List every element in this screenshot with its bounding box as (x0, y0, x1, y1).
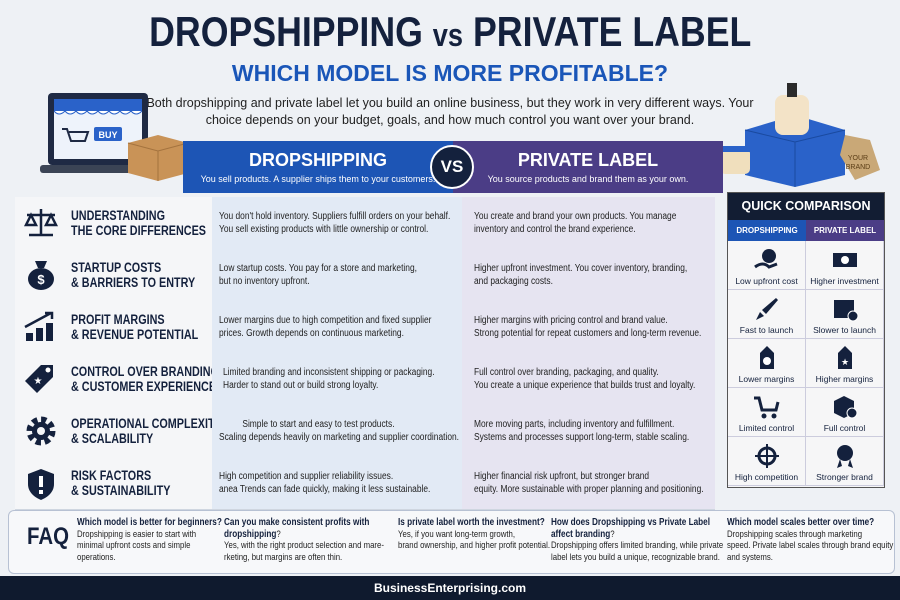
row: core differences: You don't hold inventory. Suppliers fulfill orders on your behalf. (219, 211, 450, 222)
row: profit margins: Higher margins with pricing control and brand value. (474, 315, 668, 326)
illustration: branded box (723, 83, 880, 187)
intro text: Both dropshipping and private label let you build an online business, but they work in very different ways. Your choice depends on your budget, goals, and how much control you want over your brand. (146, 96, 754, 127)
faq 5: speed. Private label scales through brand equity (727, 540, 893, 551)
title: DROPSHIPPING vs PRIVATE LABEL (149, 8, 751, 55)
row: risk: RISK FACTORS (71, 468, 151, 483)
panel: quick comparison: Stronger brand (816, 472, 873, 482)
faq 3: Is private label worth the investment? (398, 517, 545, 528)
faq 2: Can you make consistent profits with (224, 517, 369, 528)
row: branding (15, 353, 715, 405)
panel: quick comparison: Limited control (739, 423, 794, 433)
row: profit margins: Strong potential for repeat customers and long-term revenue. (474, 328, 701, 339)
row: operations (15, 405, 715, 457)
icon: scales (24, 209, 58, 236)
illustration: branded box: YOUR (848, 155, 868, 162)
row: profit margins: & REVENUE POTENTIAL (71, 327, 198, 342)
row: startup costs (15, 249, 715, 301)
faq 2: rketing, but margins are often thin. (224, 552, 342, 562)
row: risk: High competition and supplier reliability issues. (219, 471, 393, 482)
row: profit margins: PROFIT MARGINS (71, 312, 165, 327)
row: risk: & SUSTAINABILITY (71, 483, 170, 498)
row: startup costs: Low startup costs. You pay for a store and marketing, (219, 263, 417, 274)
row: operations: Simple to start and easy to test products. (242, 419, 395, 430)
FAQ label: FAQ (27, 523, 69, 550)
panel: quick comparison (727, 192, 885, 488)
icon: money bag (28, 261, 54, 290)
quick comparison heading (728, 193, 884, 220)
row: core differences: inventory and control the brand experience. (474, 224, 636, 235)
panel: quick comparison: Slower to launch (813, 325, 876, 335)
row: core differences: You sell existing products with little ownership or control. (219, 224, 428, 235)
panel: quick comparison: Fast to launch (740, 325, 793, 335)
row: profit margins: prices. Growth depends on continuous marketing. (219, 328, 404, 339)
faq 1: Which model is better for beginners? (77, 517, 222, 528)
icon: growth chart (24, 312, 54, 341)
faq 4 (551, 517, 723, 562)
icon: shield (28, 469, 54, 500)
faq 3 (398, 517, 550, 551)
panel: quick comparison: Higher margins (816, 374, 873, 384)
row: startup costs: STARTUP COSTS (71, 260, 161, 275)
faq 3: brand ownership, and higher profit potential. (398, 540, 550, 551)
panel: quick comparison: Full control (824, 423, 865, 433)
header: private label: You source products and brand them as your own. (488, 174, 688, 184)
faq 4: How does Dropshipping vs Private Label (551, 517, 710, 528)
icon: money bag: $ (37, 272, 45, 287)
vs badge: VS (441, 157, 463, 176)
row: profit margins: Lower margins due to high competition and fixed supplier (219, 315, 431, 326)
faq 5: Dropshipping scales through marketing (727, 528, 862, 540)
faq 4: Dropshipping offers limited branding, while private (551, 540, 723, 551)
footer (0, 576, 900, 600)
row: core differences (15, 197, 715, 249)
icon: tag (25, 365, 53, 393)
faq 5 (727, 517, 894, 562)
panel: quick comparison: DROPSHIPPING (736, 226, 798, 235)
icon: tag: ★ (34, 376, 43, 387)
row: operations: More moving parts, including inventory and fulfillment. (474, 419, 674, 430)
row: risk: anea Trends can fade quickly, making it less sustainable. (219, 484, 430, 495)
panel: FAQ (8, 510, 895, 574)
row: branding: You create a unique experience that builds trust and loyalty. (474, 380, 695, 391)
row: branding: Harder to stand out or build strong loyalty. (223, 380, 378, 391)
panel: quick comparison: PRIVATE LABEL (814, 226, 876, 235)
row: operations: OPERATIONAL COMPLEXITY (71, 416, 222, 431)
faq 2: dropshipping? (224, 528, 281, 540)
row: branding: CONTROL OVER BRANDING (71, 364, 219, 379)
faq 1: operations. (77, 552, 116, 562)
panel: quick comparison: High competition (735, 472, 798, 482)
vs badge (430, 145, 474, 189)
panel: quick comparison: Low upfront cost (735, 276, 798, 286)
row: startup costs: and packaging costs. (474, 276, 553, 287)
row: core differences: UNDERSTANDING (71, 208, 165, 223)
footer: BusinessEnterprising.com (374, 581, 526, 595)
illustration: laptop store (40, 93, 183, 181)
faq 2: Yes, with the right product selection and mare- (224, 540, 384, 551)
illustration: laptop store: BUY (98, 130, 118, 140)
row: startup costs: & BARRIERS TO ENTRY (71, 275, 195, 290)
faq 4: affect branding? (551, 528, 615, 540)
row: profit margins (15, 301, 715, 353)
faq 4: label lets you build a unique, recognizable brand. (551, 552, 720, 562)
faq 1: minimal upfront costs and simple (77, 540, 190, 551)
faq 5: and systems. (727, 552, 773, 562)
faq 1: Dropshipping is easier to start with (77, 528, 196, 540)
header: dropshipping: DROPSHIPPING (249, 150, 387, 170)
header: private label: PRIVATE LABEL (518, 150, 658, 170)
header: dropshipping: You sell products. A supplier ships them to your customers. (201, 174, 435, 184)
panel: quick comparison: Lower margins (739, 374, 794, 384)
row: risk: equity. More sustainable with proper planning and positioning. (474, 484, 704, 495)
panel: quick comparison: ★ (840, 357, 849, 367)
header: private label (453, 141, 723, 193)
header: dropshipping (183, 141, 453, 193)
row: risk: Higher financial risk upfront, but stronger brand (474, 471, 649, 482)
illustration: branded box: BRAND (846, 164, 870, 171)
faq 5: Which model scales better over time? (727, 517, 874, 528)
panel: quick comparison: Higher investment (810, 276, 879, 286)
faq 2 (224, 517, 384, 562)
row: operations: Scaling depends heavily on marketing and supplier coordination. (219, 432, 459, 443)
row: operations: & SCALABILITY (71, 431, 153, 446)
icon: gear (26, 416, 56, 446)
quick comparison heading: QUICK COMPARISON (742, 199, 870, 213)
row: operations: Systems and processes support long-term, stable scaling. (474, 432, 689, 443)
faq 1 (77, 517, 222, 562)
faq 3: Yes, if you want long-term growth, (398, 528, 515, 540)
row: branding: & CUSTOMER EXPERIENCE (71, 379, 216, 394)
row: startup costs: Higher upfront investment. You cover inventory, branding, (474, 263, 687, 274)
row: branding: Limited branding and inconsistent shipping or packaging. (223, 367, 435, 378)
row: startup costs: but no inventory upfront. (219, 276, 310, 287)
row: branding: Full control over branding, packaging, and quality. (474, 367, 659, 378)
row: core differences: You create and brand your own products. You manage (474, 211, 676, 222)
subtitle: WHICH MODEL IS MORE PROFITABLE? (232, 60, 668, 86)
row: risk (15, 457, 715, 510)
row: core differences: THE CORE DIFFERENCES (71, 223, 206, 238)
